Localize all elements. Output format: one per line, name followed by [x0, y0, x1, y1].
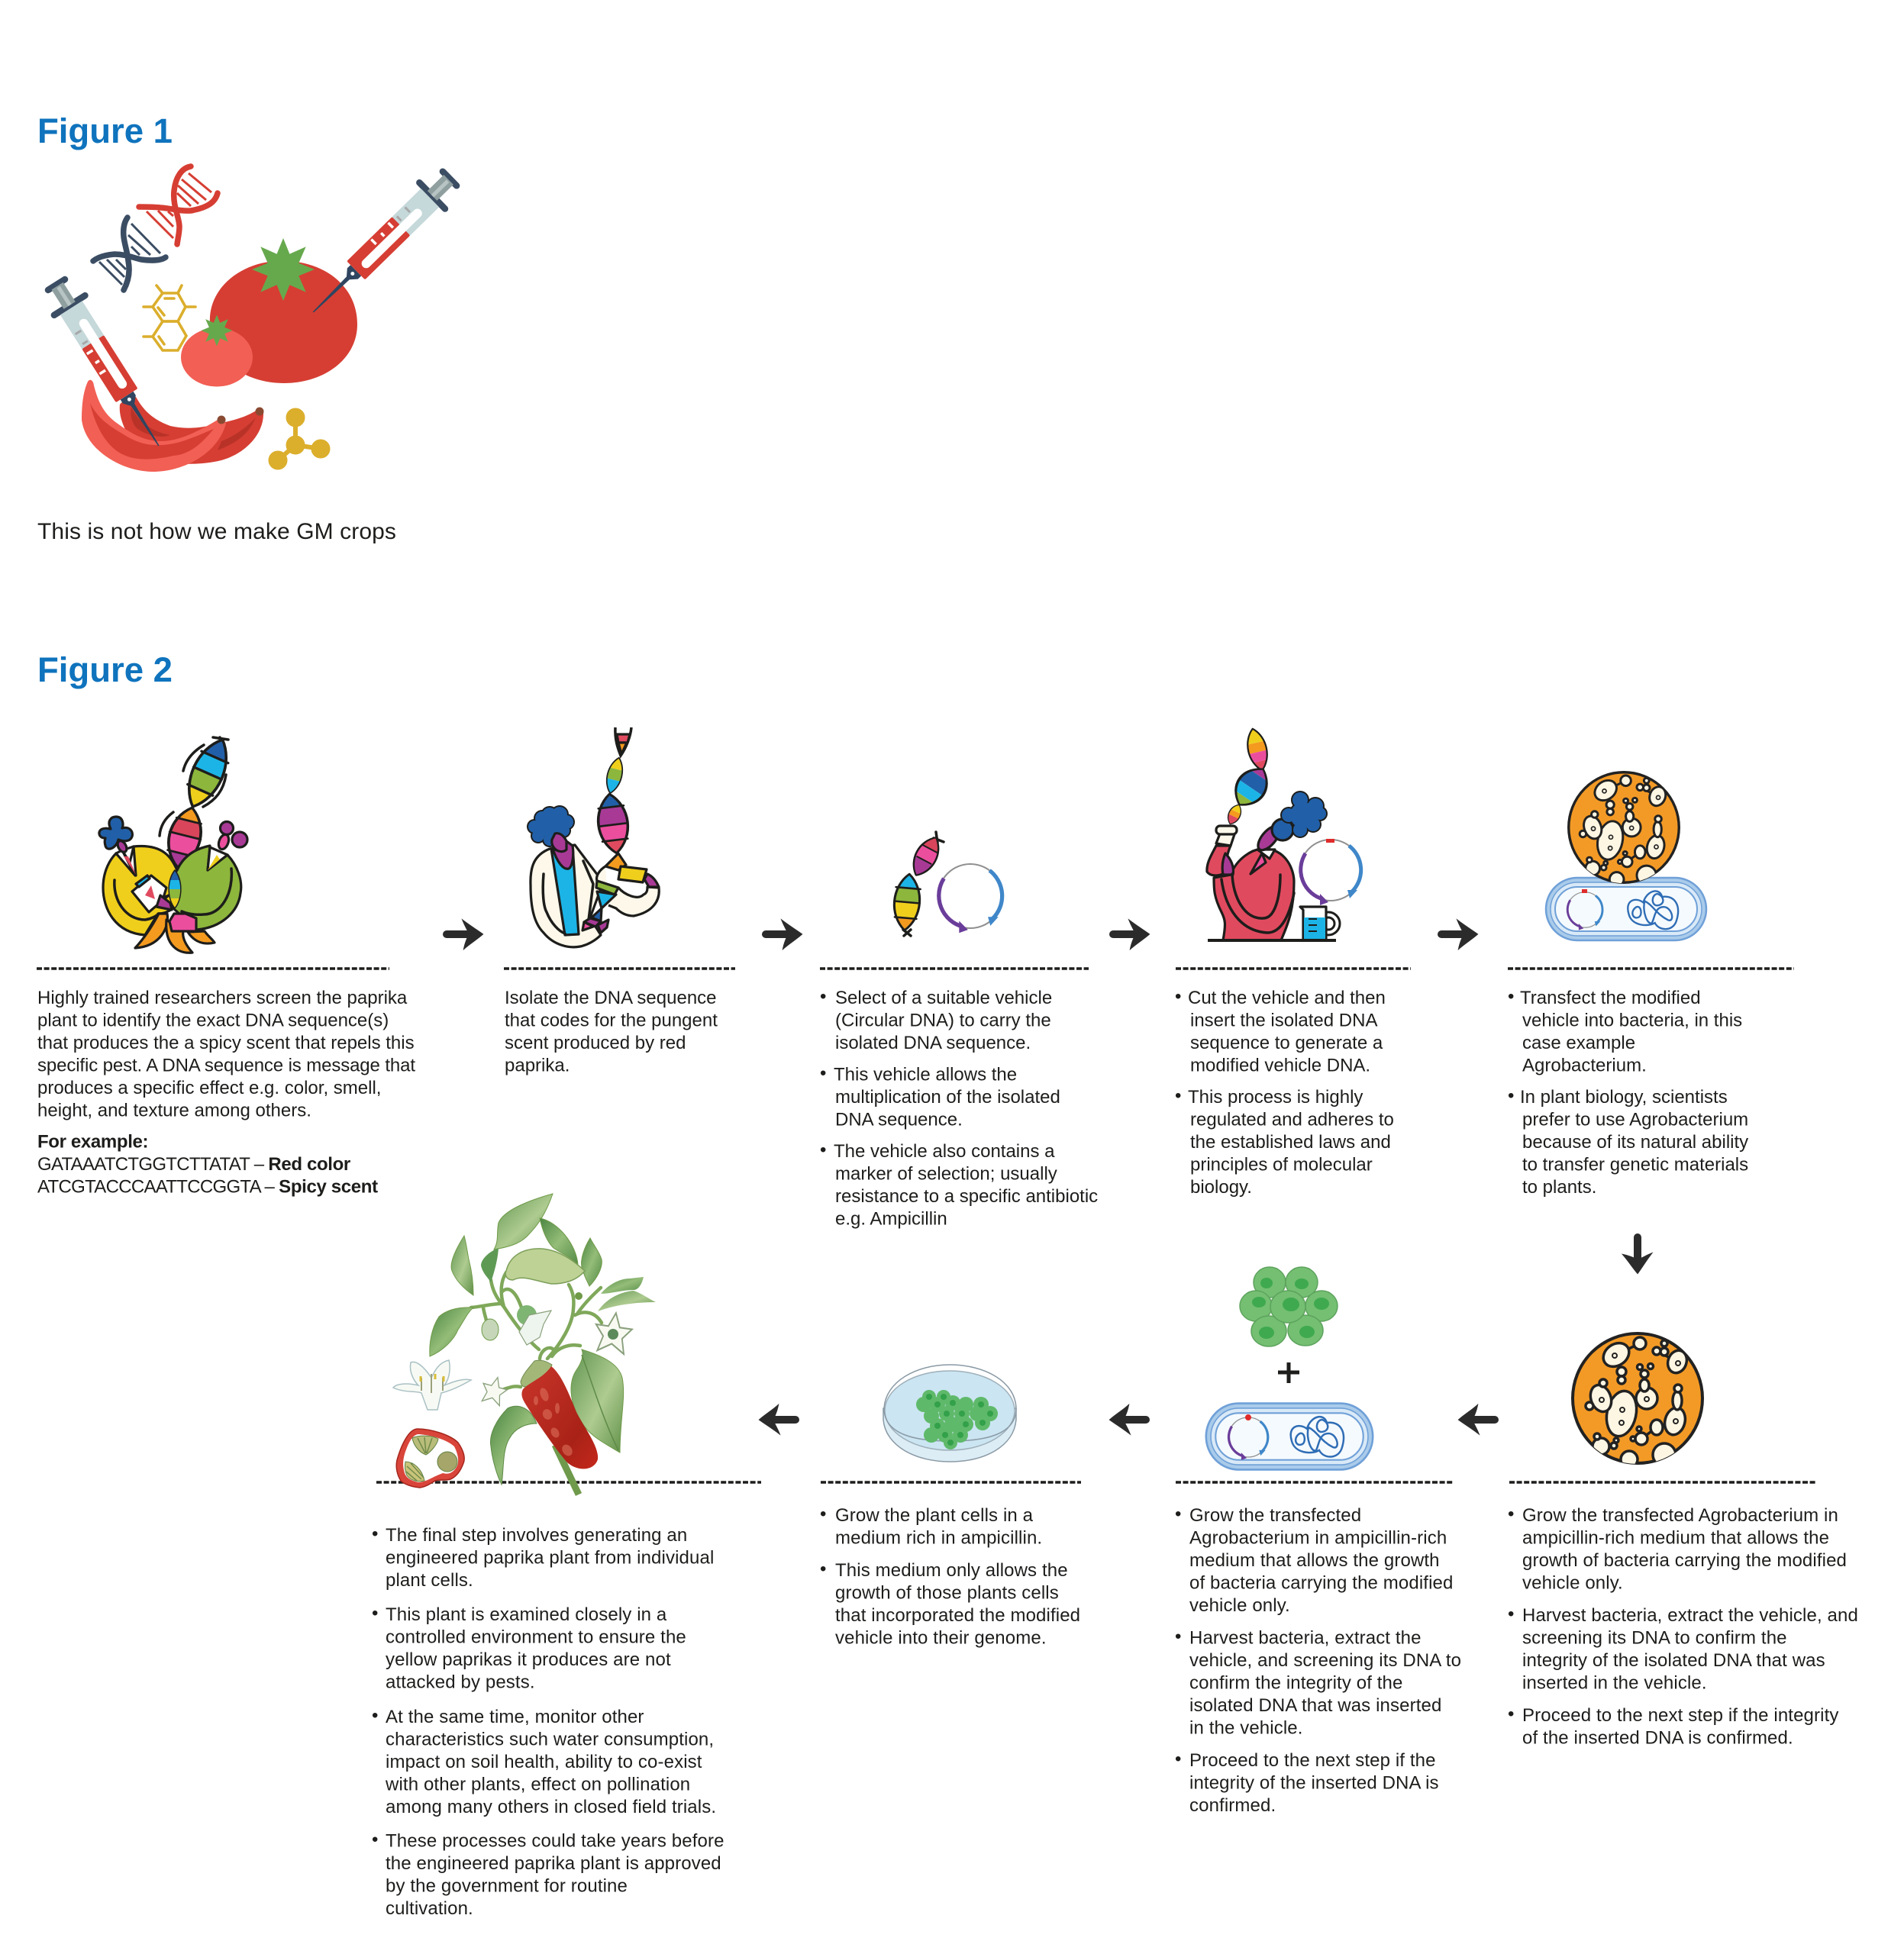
text: step 3: multiplication of the isolated — [835, 1087, 1060, 1108]
text: step 3: • — [820, 1062, 826, 1084]
icon: small tomato — [181, 314, 253, 386]
text: step 9: plant cells. — [386, 1570, 473, 1591]
text: step 4: • — [1175, 986, 1181, 1007]
text: step 5: to transfer genetic materials — [1522, 1154, 1748, 1175]
text: step 6: growth of bacteria carrying the modified — [1522, 1550, 1847, 1571]
illustration: researcher with DNA and beaker — [1207, 726, 1361, 940]
text: step 8: • — [820, 1559, 827, 1579]
text: step 7: confirmed. — [1189, 1795, 1276, 1816]
text: step 9: with other plants, effect on pollination — [385, 1774, 690, 1795]
icon: dark DNA helix — [93, 218, 166, 290]
panel: step 5 transfect — [1508, 772, 1794, 1198]
text: step 3: e.g. Ampicillin — [835, 1209, 947, 1229]
text: step 3: DNA sequence. — [835, 1110, 963, 1130]
illustration: two researchers around DNA — [99, 731, 247, 953]
illustration: petri dish — [883, 1365, 1016, 1462]
arrow: step 3 to 4 — [1113, 922, 1148, 947]
arrow: step 7 to 8 — [1111, 1407, 1146, 1432]
arrow: step 2 to 3 — [766, 922, 801, 947]
illustration: bacteria colony and Agrobacterium — [1546, 772, 1706, 940]
text: step 9: yellow paprikas it produces are not — [386, 1649, 671, 1670]
text: step 7: • — [1175, 1504, 1182, 1524]
text: step 3: This vehicle allows the — [834, 1064, 1017, 1085]
text: step 5: vehicle into bacteria, in this — [1522, 1011, 1742, 1030]
text: step 9: the engineered paprika plant is approved — [386, 1853, 721, 1874]
text: step 1: height, and texture among others. — [37, 1101, 311, 1120]
text: step 7: • — [1175, 1749, 1182, 1769]
icon: peppers — [82, 380, 264, 472]
text: step 8 — [820, 1504, 1080, 1649]
text: step 7: confirm the integrity of the — [1189, 1673, 1403, 1693]
arrow: step 8 to 9 — [760, 1407, 795, 1432]
text: step 9: characteristics such water consumption, — [386, 1730, 714, 1749]
text: step 7: vehicle only. — [1189, 1595, 1290, 1616]
text: step 6: vehicle only. — [1522, 1572, 1623, 1594]
text: step 8: This medium only allows the — [835, 1560, 1068, 1581]
text: step 4: sequence to generate a — [1190, 1033, 1383, 1053]
text: step 7: medium that allows the growth — [1189, 1550, 1440, 1571]
icon: gold molecule — [269, 408, 330, 469]
arrow: step 4 to 5 — [1441, 922, 1476, 947]
text: step 4: • — [1175, 1085, 1181, 1106]
text: step 9: At the same time, monitor other — [386, 1707, 644, 1727]
text: step 3: The vehicle also contains a — [834, 1141, 1055, 1162]
text: step 5: because of its natural ability — [1522, 1132, 1748, 1153]
icon: plant cells — [1240, 1267, 1338, 1346]
text: step 1 — [37, 988, 415, 1197]
text: step 7: Proceed to the next step if the — [1189, 1750, 1436, 1771]
text: step 9: attacked by pests. — [386, 1672, 535, 1693]
text: step 6: • — [1508, 1504, 1515, 1524]
text: step 9: • — [372, 1829, 379, 1850]
text: step 6: • — [1508, 1704, 1515, 1724]
text: step 8: • — [820, 1504, 827, 1524]
text: step 9: by the government for routine — [386, 1876, 628, 1896]
text: step 7: of bacteria carrying the modified — [1189, 1572, 1453, 1594]
text: step 1: produces a specific effect e.g. color, smell, — [37, 1078, 381, 1098]
text: step 3 — [820, 986, 1098, 1229]
illustration: paprika plant — [393, 1194, 656, 1495]
text: step 4: modified vehicle DNA. — [1190, 1055, 1370, 1076]
text: step 6: Harvest bacteria, extract the vehicle, and — [1522, 1605, 1858, 1626]
text: step 1: plant to identify the exact DNA sequence(s) — [37, 1011, 389, 1030]
text: step 7: Grow the transfected — [1189, 1505, 1361, 1526]
text: step 5: • — [1508, 1085, 1514, 1106]
text: step 8: that incorporated the modified — [835, 1605, 1080, 1626]
text: step 8: growth of those plants cells — [835, 1583, 1059, 1603]
text: step 6: ampicillin-rich medium that allows the — [1522, 1528, 1829, 1548]
text: step 6: integrity of the isolated DNA that was — [1522, 1650, 1825, 1671]
divider — [504, 967, 735, 970]
text: step 1: GATAAATCTGGTCTTATAT – Red color — [37, 1154, 350, 1175]
text: step 4: biology. — [1190, 1177, 1252, 1198]
text: step 8: Grow the plant cells in a — [835, 1505, 1034, 1526]
text: step 9: The final step involves generating an — [386, 1525, 687, 1546]
text: step 6: Proceed to the next step if the integrity — [1522, 1705, 1838, 1726]
divider — [1176, 1481, 1453, 1484]
text: step 3: Select of a suitable vehicle — [835, 988, 1052, 1008]
illustration: bacteria colony — [1573, 1333, 1702, 1468]
text: step 5: prefer to use Agrobacterium — [1522, 1110, 1748, 1130]
text: step 5: • — [1508, 986, 1514, 1007]
text: step 7 — [1175, 1504, 1461, 1816]
text: step 9: These processes could take years before — [386, 1830, 724, 1852]
text: step 1: For example: — [37, 1131, 148, 1153]
text: step 2: scent produced by red — [505, 1033, 686, 1053]
text: step 1: that produces the a spicy scent that repels this — [37, 1033, 415, 1053]
text: step 3: resistance to a specific antibiotic — [835, 1186, 1098, 1207]
panel: step 1 screen — [37, 731, 415, 1197]
icon: Agrobacterium capsule — [1206, 1404, 1373, 1469]
divider — [376, 1481, 761, 1484]
text: step 5: to plants. — [1522, 1177, 1596, 1198]
illustration: figure 1, syringes injecting tomatoes and peppers — [41, 166, 463, 472]
text: step 5: In plant biology, scientists — [1520, 1087, 1728, 1108]
icon: plus — [1278, 1362, 1299, 1383]
illustration: researcher holding DNA — [527, 727, 659, 947]
text: step 9 — [372, 1524, 724, 1919]
text: step 7: • — [1175, 1626, 1182, 1647]
text: step 7: vehicle, and screening its DNA to — [1189, 1650, 1461, 1671]
text: step 3: (Circular DNA) to carry the — [835, 1011, 1051, 1030]
arrow: step 5 to 6 — [1625, 1237, 1650, 1272]
text: step 1: Highly trained researchers screen the paprika — [37, 988, 408, 1008]
text: step 9: impact on soil health, ability to co-exist — [386, 1752, 702, 1772]
divider — [1508, 967, 1794, 970]
text: step 2: Isolate the DNA sequence — [505, 988, 717, 1008]
text: step 4: regulated and adheres to — [1190, 1110, 1394, 1130]
divider — [1176, 967, 1411, 970]
text: step 5: Transfect the modified — [1520, 988, 1701, 1008]
text: step 6: inserted in the vehicle. — [1522, 1673, 1707, 1693]
text: step 9: • — [372, 1524, 379, 1544]
text: step 4: principles of molecular — [1190, 1154, 1373, 1175]
icon: red DNA helix — [139, 166, 218, 244]
divider — [37, 967, 389, 970]
divider — [821, 1481, 1081, 1484]
panel: step 8 plant cells in ampicillin — [820, 1365, 1081, 1649]
text: step 7: integrity of the inserted DNA is — [1189, 1772, 1439, 1794]
text: step 7: Agrobacterium in ampicillin-rich — [1189, 1528, 1447, 1548]
panel: step 9 engineered plant — [372, 1194, 761, 1919]
divider — [820, 967, 1089, 970]
text: step 3: • — [820, 986, 826, 1007]
heading: Figure 1: Figure 1 — [37, 111, 173, 150]
arrow: step 1 to 2 — [447, 922, 482, 947]
text: step 6 — [1508, 1504, 1858, 1748]
icon: syringe in tomato — [301, 166, 463, 325]
icon: hexagon molecule — [144, 285, 195, 350]
text: step 3: isolated DNA sequence. — [835, 1033, 1031, 1053]
text: step 9: This plant is examined closely in a — [386, 1604, 667, 1625]
text: step 8: medium rich in ampicillin. — [835, 1528, 1042, 1548]
text: step 2: paprika. — [505, 1055, 570, 1076]
panel: step 3 vehicle — [820, 831, 1098, 1229]
illustration: DNA and circular vehicle — [888, 831, 1002, 936]
panel: step 7 grow with plant cells — [1175, 1267, 1461, 1816]
text: step 2 — [505, 988, 718, 1076]
text: step 4: the established laws and — [1190, 1132, 1391, 1153]
panel: step 4 cut and insert — [1175, 726, 1411, 1198]
text: step 9: • — [372, 1603, 379, 1623]
text: step 7: Harvest bacteria, extract the — [1189, 1627, 1422, 1649]
text: step 3: marker of selection; usually — [835, 1163, 1057, 1185]
text: step 8: vehicle into their genome. — [835, 1627, 1047, 1649]
panel: step 2 isolate — [504, 727, 735, 1076]
caption: figure 1: This is not how we make GM crops — [37, 519, 396, 544]
text: step 9: engineered paprika plant from individual — [386, 1548, 714, 1568]
text: step 4 — [1175, 986, 1394, 1198]
arrow: step 6 to 7 — [1460, 1407, 1495, 1432]
text: step 6: of the inserted DNA is confirmed. — [1522, 1728, 1793, 1748]
text: step 7: isolated DNA that was inserted — [1189, 1695, 1441, 1716]
text: step 5: case example — [1522, 1033, 1635, 1053]
icon: syringe in pepper — [41, 275, 174, 456]
text: step 4: This process is highly — [1188, 1087, 1363, 1108]
illustration: plant cells plus Agrobacterium — [1206, 1267, 1373, 1469]
divider — [1509, 1481, 1817, 1484]
text: step 6: Grow the transfected Agrobacterium in — [1522, 1505, 1838, 1526]
text: step 2: that codes for the pungent — [505, 1011, 718, 1030]
text: step 4: Cut the vehicle and then — [1188, 988, 1386, 1008]
text: step 6: • — [1508, 1604, 1515, 1624]
text: step 9: controlled environment to ensure the — [386, 1627, 686, 1647]
text: step 1: specific pest. A DNA sequence is message that — [37, 1055, 415, 1076]
text: step 9: among many others in closed field trials. — [386, 1797, 716, 1817]
panel: step 6 grow Agrobacterium — [1508, 1333, 1858, 1748]
text: step 4: insert the isolated DNA — [1190, 1011, 1377, 1030]
text: step 7: in the vehicle. — [1189, 1717, 1303, 1739]
text: step 9: cultivation. — [386, 1898, 473, 1919]
text: step 5: Agrobacterium. — [1522, 1055, 1647, 1076]
text: step 6: screening its DNA to confirm the — [1522, 1627, 1787, 1649]
text: step 9: • — [372, 1705, 379, 1726]
text: step 1: ATCGTACCCAATTCCGGTA – Spicy scent — [37, 1177, 378, 1197]
icon: large tomato — [210, 238, 357, 383]
text: step 5 — [1508, 986, 1748, 1198]
text: step 3: • — [820, 1140, 826, 1160]
heading: Figure 2: Figure 2 — [37, 650, 173, 689]
